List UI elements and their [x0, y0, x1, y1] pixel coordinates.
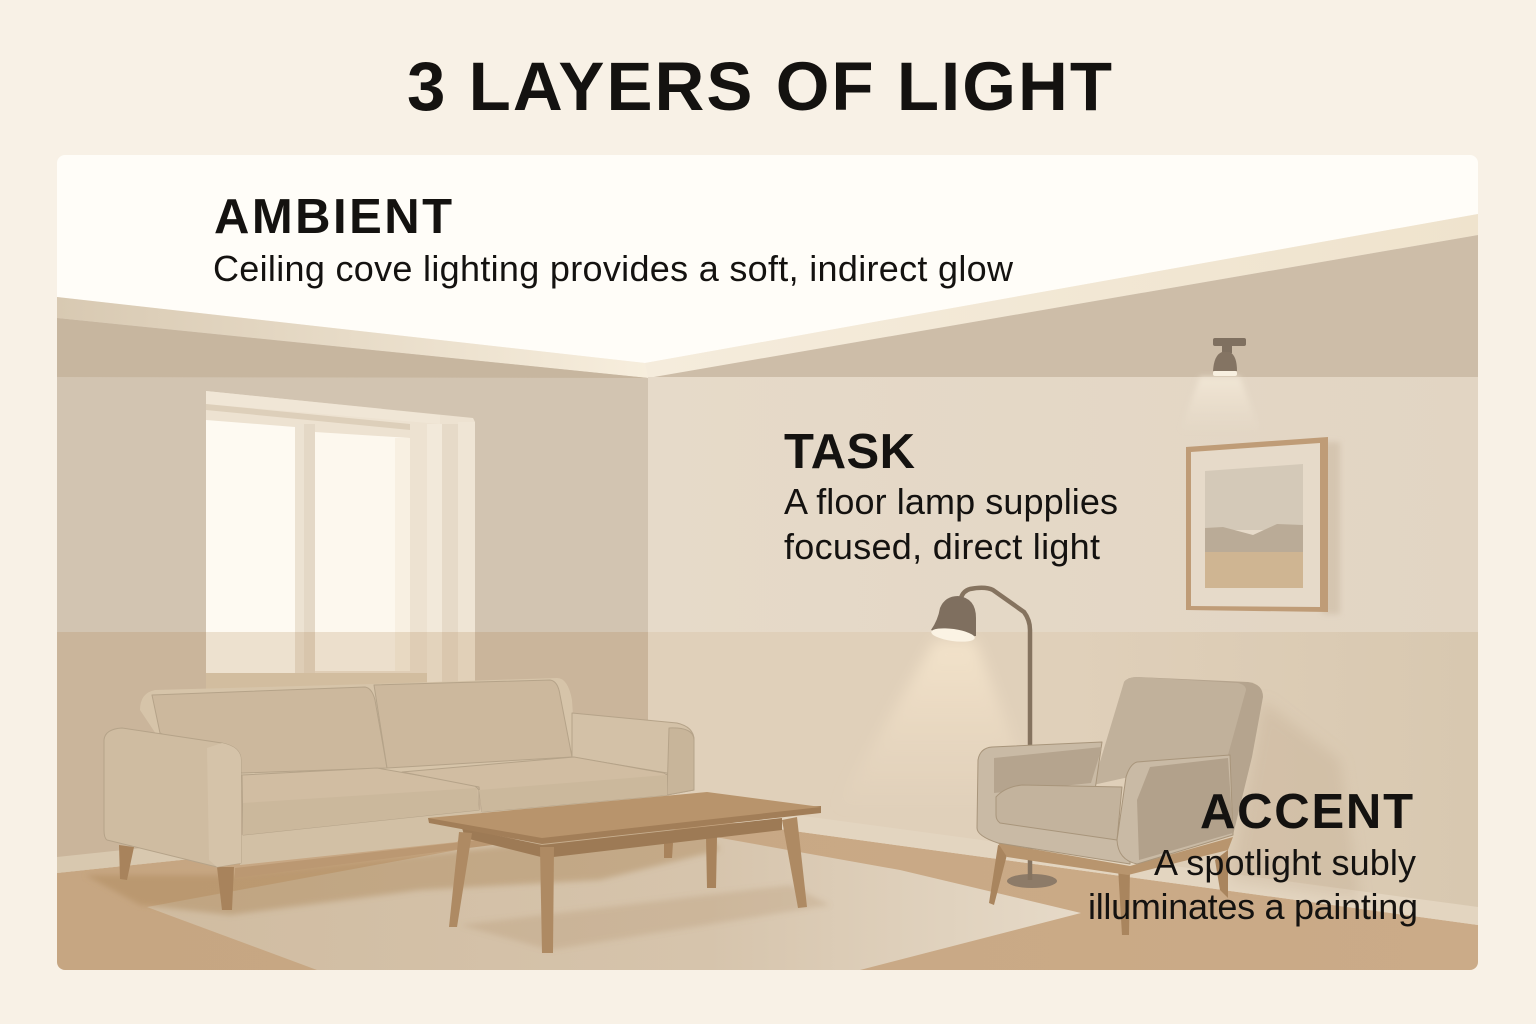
armchair seat cushion — [996, 785, 1122, 840]
window — [206, 391, 475, 690]
spotlight fixture — [1213, 338, 1246, 376]
lower wall band overlay — [57, 632, 648, 857]
left wall — [57, 318, 648, 873]
text block: ambient: AMBIENT — [214, 190, 452, 244]
ceiling cove trim — [57, 214, 1478, 378]
coffee table shadow — [460, 885, 830, 950]
sofa left arm — [104, 728, 241, 867]
sofa — [104, 678, 694, 910]
title: 3 LAYERS OF LIGHT — [407, 48, 1112, 125]
baseboards — [57, 810, 1478, 925]
right wall — [648, 235, 1478, 925]
text block: ambient — [213, 190, 1014, 289]
ceiling: ambient layer — [57, 155, 1478, 363]
text block: task: focused, direct light — [784, 526, 1100, 567]
painting sky — [1205, 464, 1303, 530]
sofa seat right — [402, 757, 667, 812]
lamp pole and arm — [961, 588, 1030, 880]
sofa back cushion left — [152, 687, 387, 773]
sofa shadow on floor — [85, 825, 720, 915]
sofa base — [240, 790, 667, 865]
armchair left arm — [977, 742, 1130, 864]
sofa seat left — [242, 768, 479, 835]
table legs — [449, 817, 807, 953]
rug — [147, 820, 1081, 970]
armchair — [977, 677, 1263, 935]
sofa back — [140, 678, 573, 774]
armchair back front — [1093, 677, 1246, 785]
table back leg — [706, 837, 717, 888]
sofa right arm — [572, 713, 694, 795]
text block: accent: illuminates a painting — [1088, 886, 1418, 927]
text block: accent: A spotlight subly — [1154, 842, 1416, 883]
panel: room illustration — [57, 155, 1478, 970]
text block: task: A floor lamp supplies — [784, 481, 1118, 522]
table top — [428, 792, 821, 838]
sofa legs — [119, 843, 673, 910]
framed painting — [1186, 437, 1328, 612]
table edge — [428, 806, 821, 844]
table apron — [462, 818, 782, 858]
armchair legs — [989, 845, 1228, 935]
lamp shade — [931, 596, 976, 636]
spotlight light beam — [1180, 377, 1260, 432]
text block: accent — [1088, 785, 1418, 927]
text block: accent: ACCENT — [1200, 785, 1413, 839]
sofa back cushion right — [374, 680, 572, 768]
text block: ambient: Ceiling cove lighting provides a soft, indirect glow — [213, 248, 1014, 289]
floor — [57, 811, 1478, 970]
painting hills — [1205, 524, 1303, 552]
armchair base rail — [998, 837, 1233, 875]
floor lamp — [930, 588, 1057, 888]
painting shadow — [1322, 442, 1340, 614]
sofa rail — [235, 840, 492, 874]
lamp bulb glow — [931, 628, 975, 642]
coffee table — [428, 792, 821, 953]
lamp base — [1007, 874, 1057, 888]
armchair back side — [1124, 677, 1263, 835]
floor lamp light cone — [898, 640, 996, 726]
text block: task: TASK — [784, 425, 915, 479]
armchair wall shadow — [1235, 710, 1357, 898]
painting field — [1205, 552, 1303, 588]
text block: task — [784, 425, 1118, 567]
armchair right arm — [1117, 755, 1233, 864]
